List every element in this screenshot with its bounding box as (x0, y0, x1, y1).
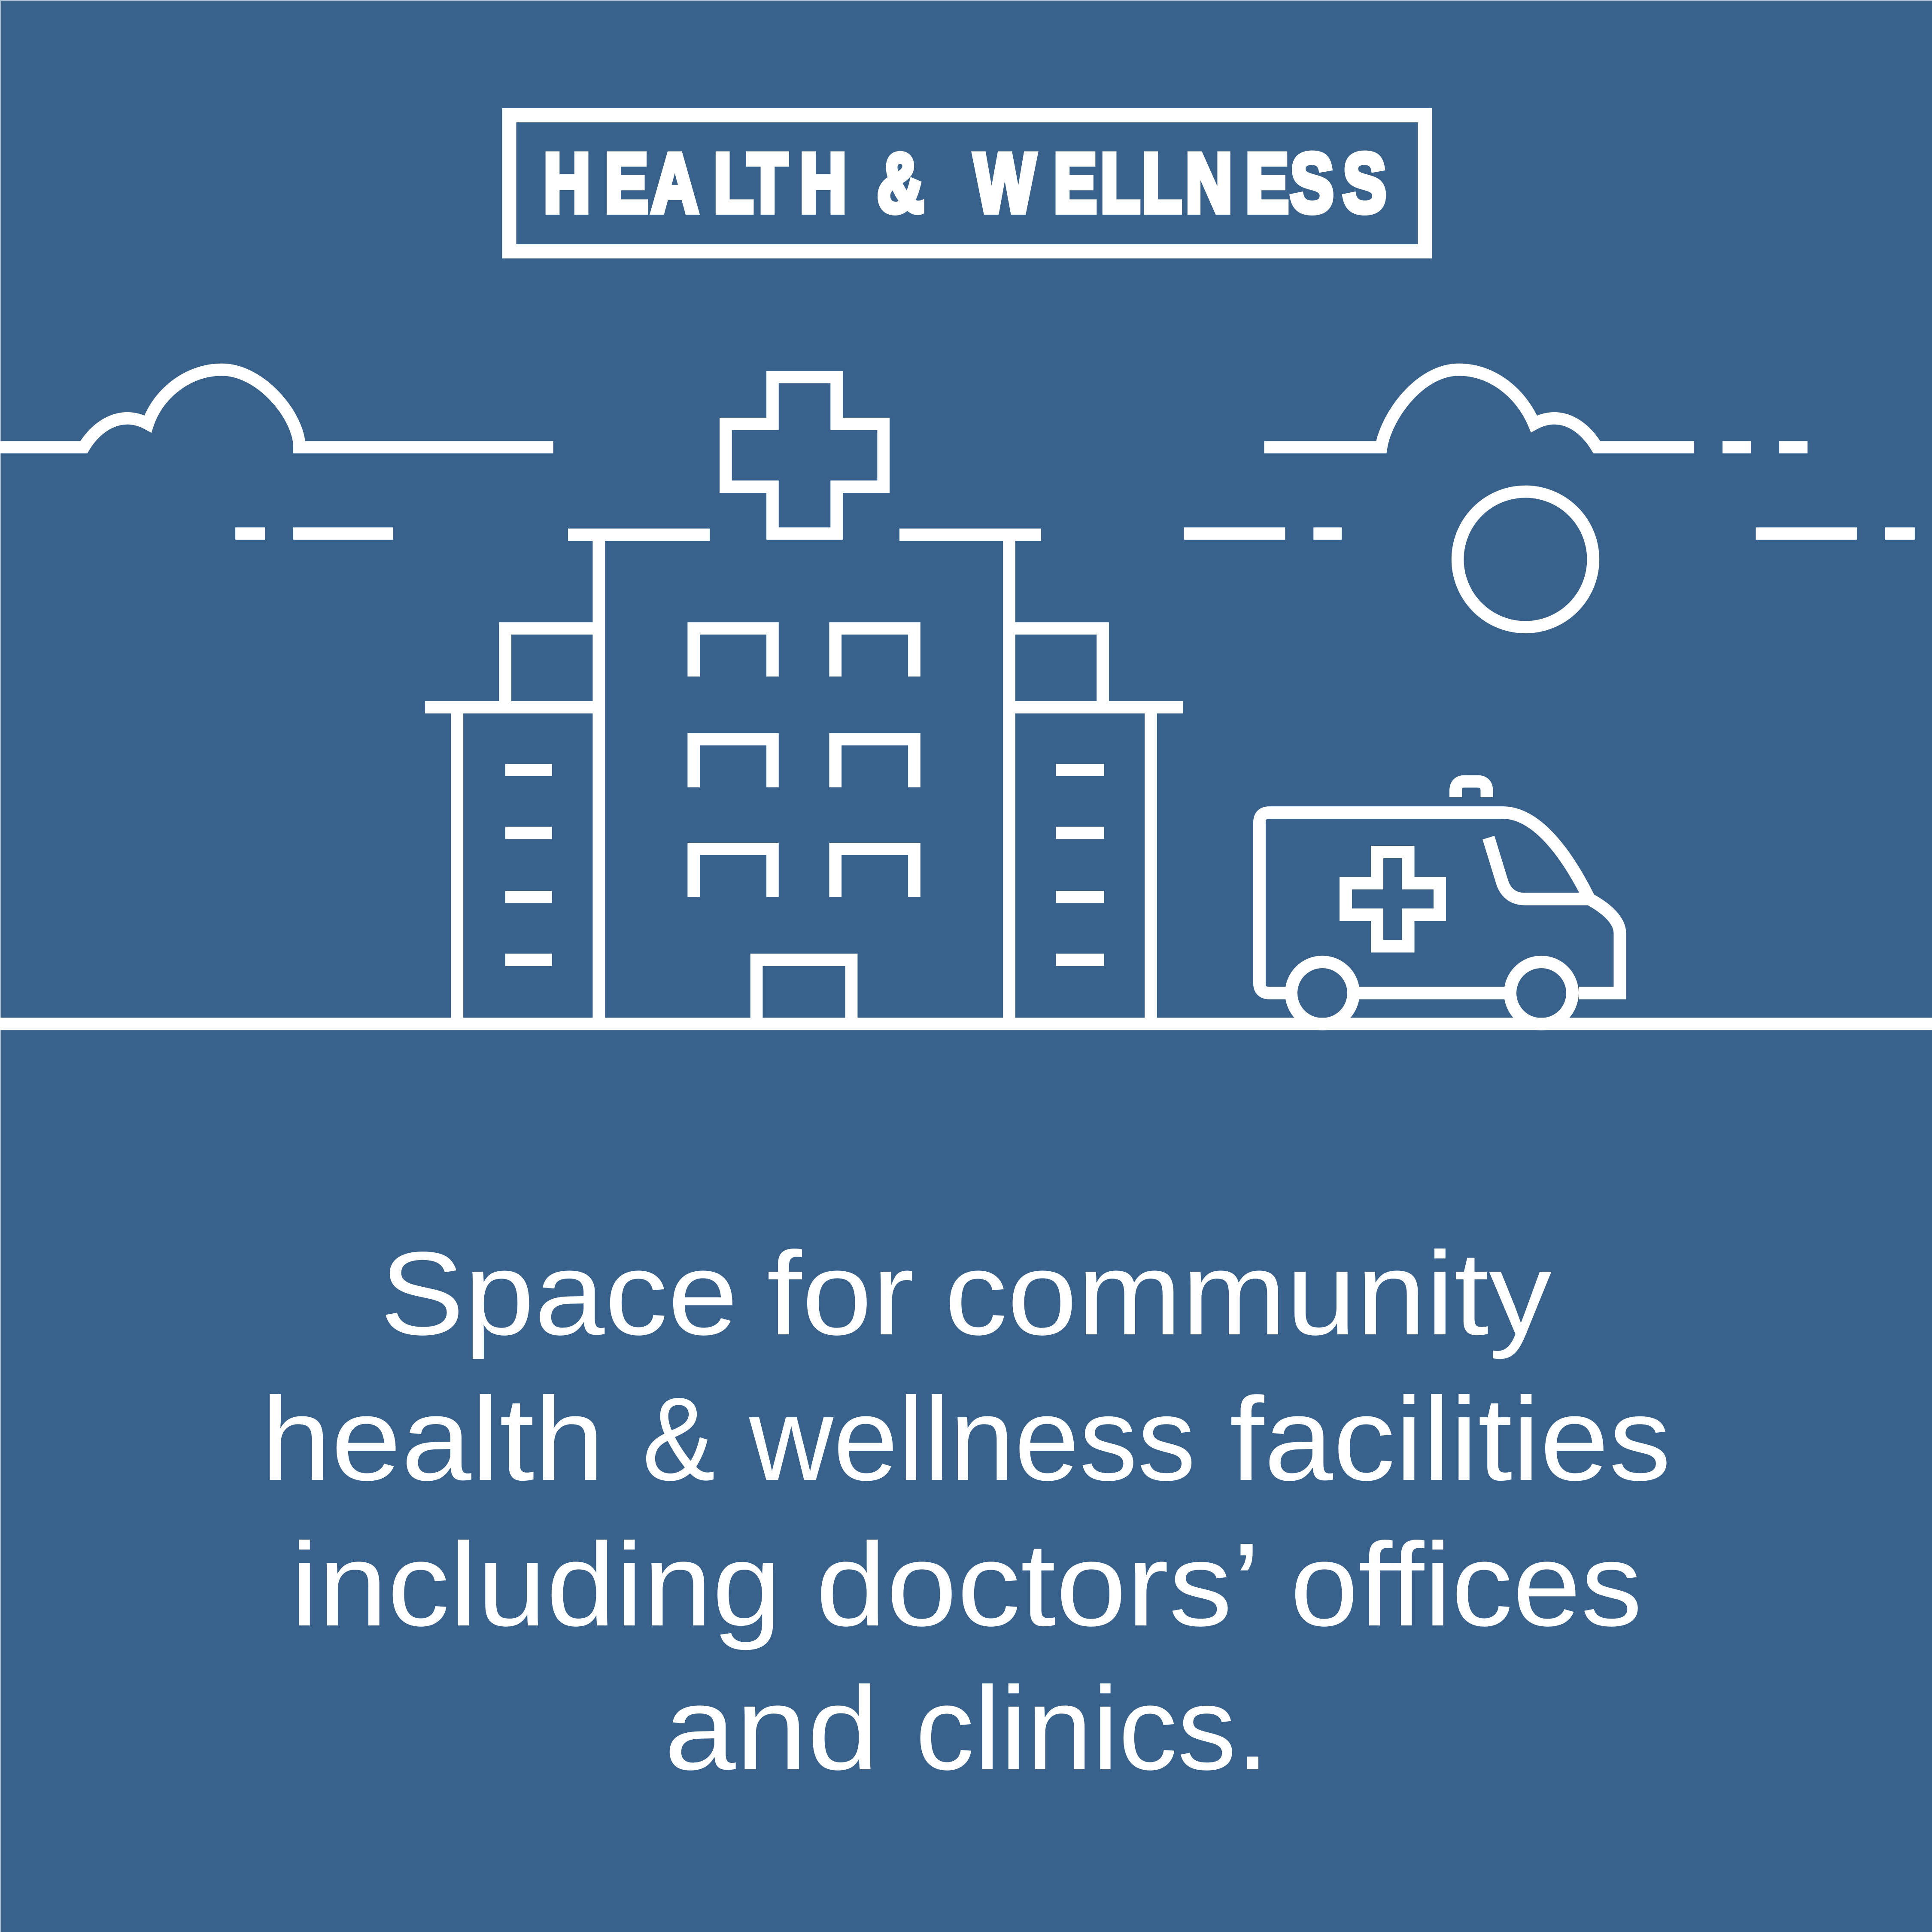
line 2: facilities (1230, 1373, 1671, 1505)
line 2: health (261, 1373, 605, 1505)
front wheel (1510, 962, 1572, 1024)
left wing windows (505, 770, 552, 960)
description text (261, 1227, 1671, 1795)
icon: ambulance (1260, 781, 1620, 1024)
right wind dashes (1184, 532, 1915, 536)
left wind dashes (235, 532, 393, 536)
right cloud with dashes (1264, 370, 1807, 447)
line 1: Space (380, 1227, 738, 1360)
ambulance body (1260, 813, 1620, 993)
right wing windows (1056, 770, 1104, 960)
ambulance siren (1455, 781, 1487, 797)
ambulance windshield (1488, 838, 1589, 899)
hospital door (756, 960, 851, 1023)
line 4: clinics. (915, 1662, 1269, 1795)
left cloud (0, 370, 553, 447)
hospital right wing (1009, 629, 1183, 1023)
rear wheel (1291, 962, 1353, 1024)
line 2: wellness (747, 1373, 1196, 1505)
icon: medical cross on hospital (726, 377, 884, 534)
line 1: community (945, 1227, 1552, 1360)
ground line (0, 1022, 1932, 1026)
icon: sun (1458, 492, 1593, 627)
tower windows (694, 629, 914, 897)
hospital main tower (568, 535, 1041, 1023)
title frame (509, 115, 1425, 252)
illustration: city scene (0, 370, 1932, 1024)
ambulance cross (1346, 852, 1440, 946)
title badge (509, 115, 1425, 252)
line 3: including (291, 1519, 781, 1651)
hospital left wing (425, 629, 599, 1023)
line 1: for (767, 1227, 914, 1360)
title text: HEALTH & WELLNESS (544, 137, 1386, 229)
line 4: and (664, 1662, 879, 1795)
line 3: offices (1290, 1519, 1642, 1651)
line 3: doctors’ (816, 1519, 1256, 1651)
line 2: & (642, 1373, 715, 1505)
